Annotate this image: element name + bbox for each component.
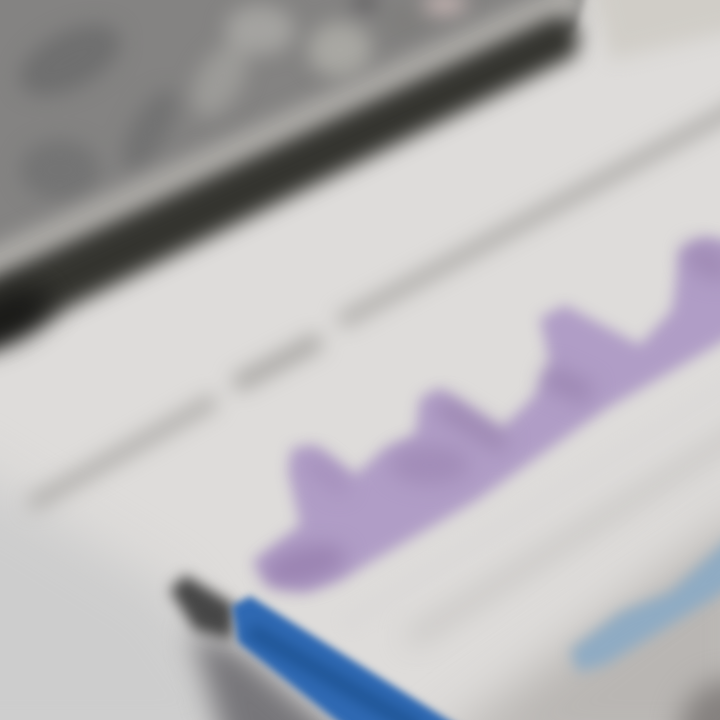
group: calculator xyxy=(0,0,600,372)
pen shadow xyxy=(190,630,370,720)
paper light band below chart xyxy=(345,367,720,625)
calculator key blotches xyxy=(8,0,467,200)
group: pen xyxy=(170,575,480,720)
blue line chart xyxy=(570,510,720,672)
purple chart darker blobs xyxy=(260,235,720,593)
paper printed line segments xyxy=(30,95,720,505)
top right table tone xyxy=(585,0,720,60)
lower left paper shading xyxy=(0,450,290,720)
pen blue barrel xyxy=(232,596,480,720)
lower right paper shading xyxy=(420,500,720,720)
calculator darkest left corner xyxy=(0,277,60,359)
purple area chart xyxy=(252,238,720,592)
bottom right corner shadow xyxy=(680,680,720,720)
pen dark blue core xyxy=(250,630,420,720)
calculator light rim xyxy=(0,0,580,280)
pen dark tip xyxy=(170,575,235,640)
calculator dark front edge xyxy=(0,18,580,372)
paper faint ruled line xyxy=(410,420,720,640)
calculator body xyxy=(0,0,600,330)
